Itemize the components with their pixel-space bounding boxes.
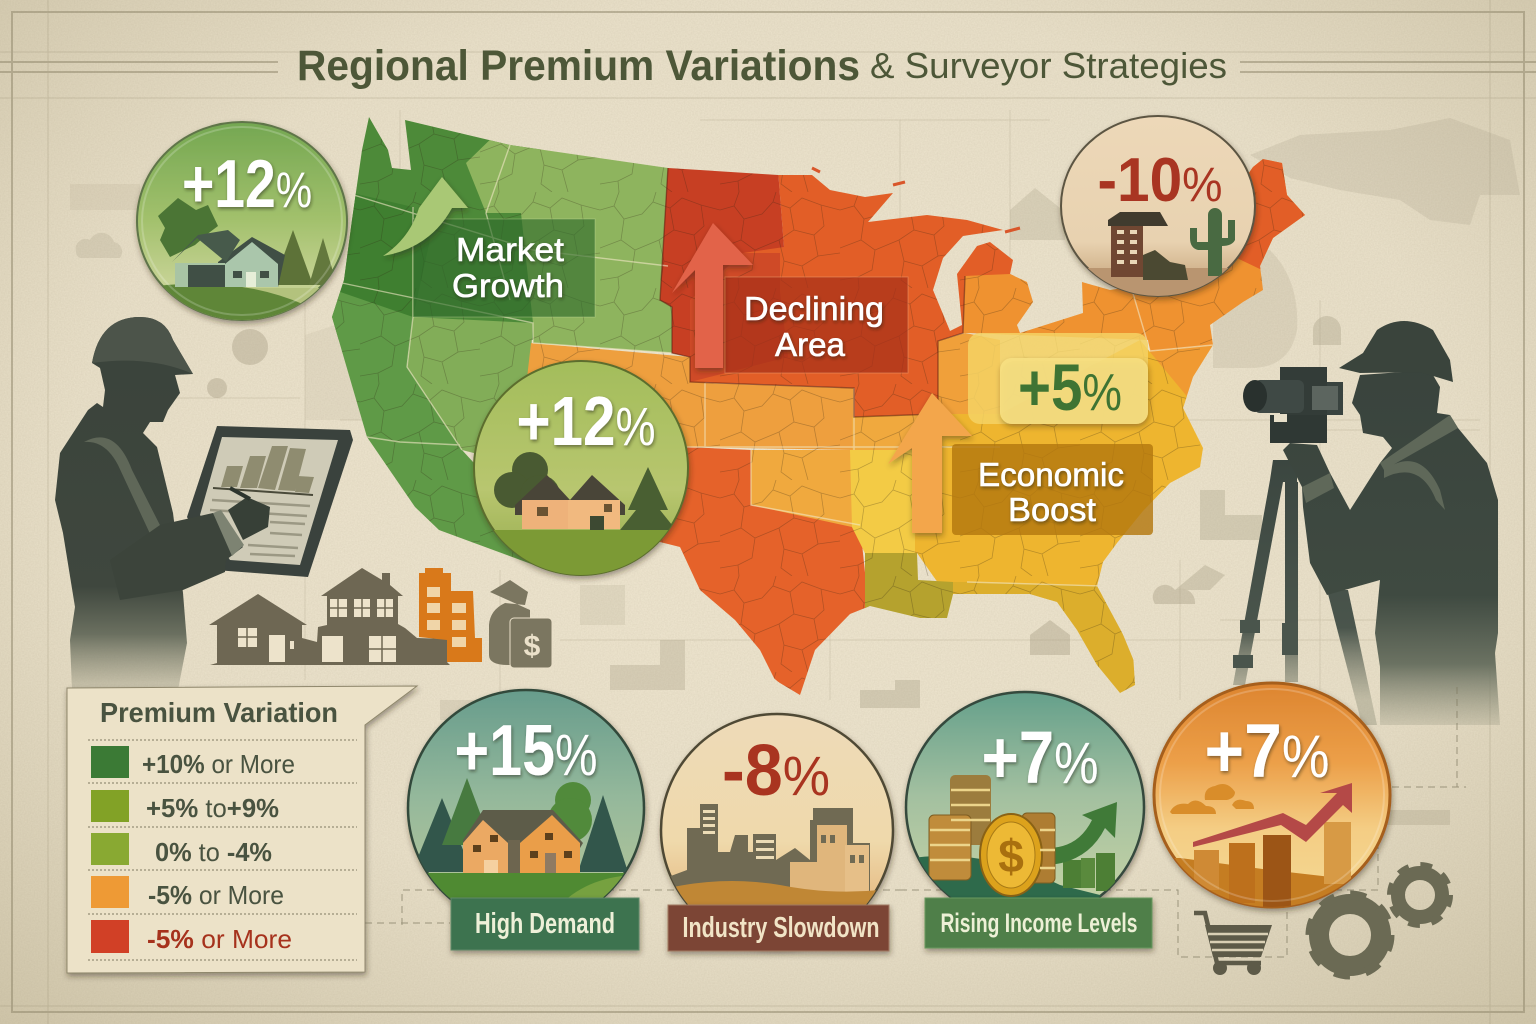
region: Oklahoma and Arkansas bbox=[751, 450, 852, 527]
region: Texas and southern plains bbox=[660, 447, 868, 695]
region: Pacific Northwest bbox=[332, 117, 540, 340]
title main: Regional Premium Variations bbox=[297, 42, 860, 90]
icon: tablet bbox=[187, 426, 353, 577]
arrow: declining area bbox=[672, 223, 753, 368]
value: +12%: +12% bbox=[516, 382, 656, 460]
legend row: -5% or more red: -5% or More bbox=[147, 924, 292, 954]
region: Great Basin bbox=[407, 317, 533, 453]
icon: tripod bbox=[1233, 460, 1298, 685]
value: +7%: +7% bbox=[1204, 709, 1330, 794]
value: -10%: -10% bbox=[1098, 146, 1222, 215]
arrow: economic boost bbox=[888, 393, 972, 533]
dollar sign: $ bbox=[998, 830, 1024, 882]
icon: shopping cart bbox=[1194, 913, 1272, 975]
panel: Economic Boost bbox=[888, 393, 1153, 535]
hard hat highlight bbox=[92, 317, 193, 374]
label: Economic Boost: Boost bbox=[1008, 491, 1096, 528]
badge: +15% High Demand bbox=[400, 690, 650, 950]
legend row: 0% to -4% bbox=[91, 833, 272, 867]
legend row: -5% or more red bbox=[91, 920, 292, 954]
region: Southeast bbox=[852, 340, 1210, 600]
surveyor with tablet bbox=[55, 317, 353, 690]
legend row: 0% to -4%: 0% to -4% bbox=[155, 837, 272, 867]
tripod clamps bbox=[1233, 620, 1298, 668]
legend row: +10% or more bbox=[91, 746, 295, 779]
badge: -10% northeast bbox=[1060, 116, 1260, 300]
region: Louisiana bbox=[865, 553, 953, 618]
region: Nebraska patch bbox=[690, 253, 788, 382]
label: Market Growth: Growth bbox=[452, 267, 564, 304]
label: High Demand: High Demand bbox=[475, 908, 615, 940]
legend row: -5% or more orange bbox=[91, 876, 284, 910]
region: Upper Midwest bbox=[672, 170, 1020, 417]
map regions bbox=[320, 100, 1320, 710]
value: -8%: -8% bbox=[722, 731, 830, 811]
region: California bbox=[332, 292, 534, 565]
badge: +7% trend chart bbox=[1150, 683, 1400, 930]
badge: +12% northwest houses bbox=[130, 122, 350, 330]
panel: Declining Area bbox=[672, 223, 908, 373]
label: Industry Slowdown: Industry Slowdown bbox=[682, 912, 880, 944]
value: +7%: +7% bbox=[982, 716, 1098, 799]
label: High Demand bbox=[451, 898, 639, 950]
city and money icons bbox=[209, 568, 552, 668]
label: Economic Boost: Economic bbox=[978, 456, 1124, 493]
region: Central orange belt bbox=[520, 343, 854, 450]
label: Market Growth: Market bbox=[456, 231, 564, 268]
surveyor with camera bbox=[1233, 321, 1500, 725]
label: Rising Income Levels bbox=[925, 898, 1152, 948]
hard hat bbox=[1339, 321, 1453, 382]
tripod rear leg bbox=[1327, 590, 1377, 725]
region: Northern Rockies bbox=[466, 130, 672, 353]
silhouette: right surveyor bbox=[1283, 370, 1500, 725]
badge: +12% southwest house bbox=[470, 361, 700, 590]
legend: Premium Variation bbox=[67, 686, 417, 973]
icons: houses bbox=[209, 568, 450, 665]
coat strap bbox=[84, 437, 165, 538]
region: Mid-Atlantic bbox=[1150, 345, 1213, 410]
value: +5%: +5% bbox=[1018, 350, 1122, 424]
arm and hand bbox=[110, 488, 270, 600]
background ghost icons bbox=[70, 118, 1520, 825]
region: Missouri yellow bbox=[850, 450, 915, 553]
legend row: -5% or more orange: -5% or More bbox=[148, 880, 284, 910]
region: Kentucky orange bbox=[852, 416, 918, 450]
map of the United States bbox=[320, 100, 1320, 710]
icon: survey camera bbox=[1243, 367, 1343, 443]
label: Industry Slowdown bbox=[668, 905, 889, 951]
legend title: Premium Variation bbox=[100, 697, 338, 728]
legend row: +5% to +9%: +5% to+9% bbox=[146, 793, 279, 823]
arrow: market growth bbox=[383, 177, 468, 256]
region: Maine bbox=[1238, 159, 1305, 270]
legend row: +5% to +9% bbox=[91, 790, 279, 823]
region: Northeast bbox=[963, 160, 1320, 351]
region: Florida and Gulf coast bbox=[953, 582, 1150, 700]
value: +15%: +15% bbox=[454, 711, 598, 791]
panel: Market Growth bbox=[383, 177, 595, 317]
icon: orange apartments bbox=[419, 568, 482, 662]
title secondary: & Surveyor Strategies bbox=[870, 45, 1227, 86]
label: Declining Area: Declining bbox=[744, 290, 884, 327]
label: Rising Income Levels: Rising Income Levels bbox=[940, 908, 1138, 938]
label: Declining Area: Area bbox=[775, 326, 846, 363]
region: Washington dark core bbox=[337, 194, 416, 316]
coat details bbox=[1302, 415, 1458, 510]
panel: +5% highlight bbox=[968, 333, 1148, 424]
title bbox=[297, 42, 1227, 90]
badge: -8% Industry Slowdown bbox=[660, 714, 893, 951]
icon: money bag bbox=[489, 580, 530, 665]
region: Dakotas declining area bbox=[660, 165, 784, 357]
badge: +7% Rising Income Levels bbox=[900, 692, 1152, 948]
value: +12%: +12% bbox=[182, 146, 312, 222]
region: Ohio valley bbox=[938, 333, 1000, 420]
silhouette: left surveyor bbox=[55, 317, 193, 690]
city and money icons: $ bbox=[524, 630, 541, 663]
icon: gears bbox=[1310, 866, 1449, 975]
legend row: +10% or more: +10% or More bbox=[142, 749, 295, 779]
